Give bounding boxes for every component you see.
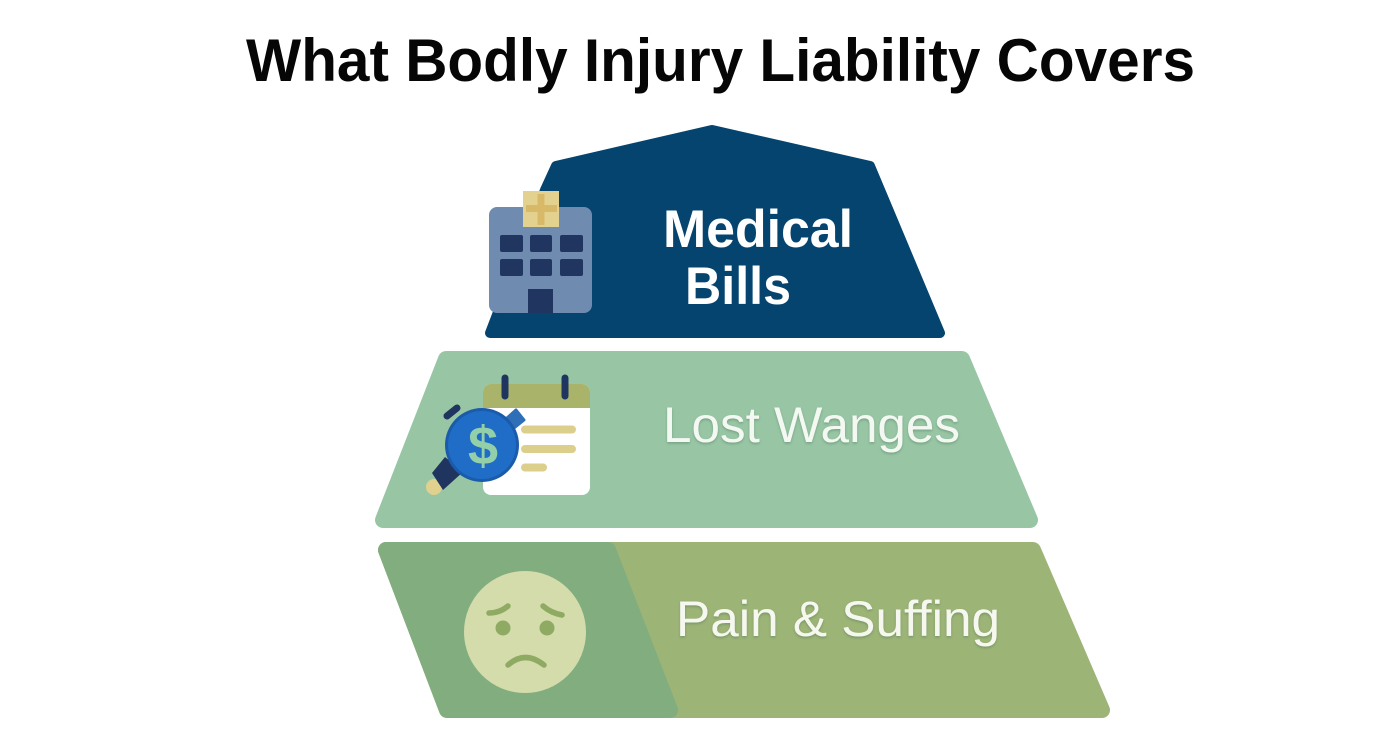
label: pain and suffing: Pain & Suffing [676,591,1000,647]
label: lost wanges: Lost Wanges [663,397,960,453]
label: medical: Medical [663,200,853,259]
icon: hospital [489,191,592,313]
label: bills: Bills [685,257,791,316]
icon: sad face [464,571,586,693]
icon: calendar with dollar timer: $ [468,416,498,476]
left icon band [386,550,670,710]
icon: calendar with dollar timer [426,378,590,495]
title: What Bodly Injury Liability Covers [246,27,1195,94]
panel: lost wages [383,359,1030,520]
panel: medical bills [489,130,940,333]
panel: pain and suffering [386,550,1102,710]
